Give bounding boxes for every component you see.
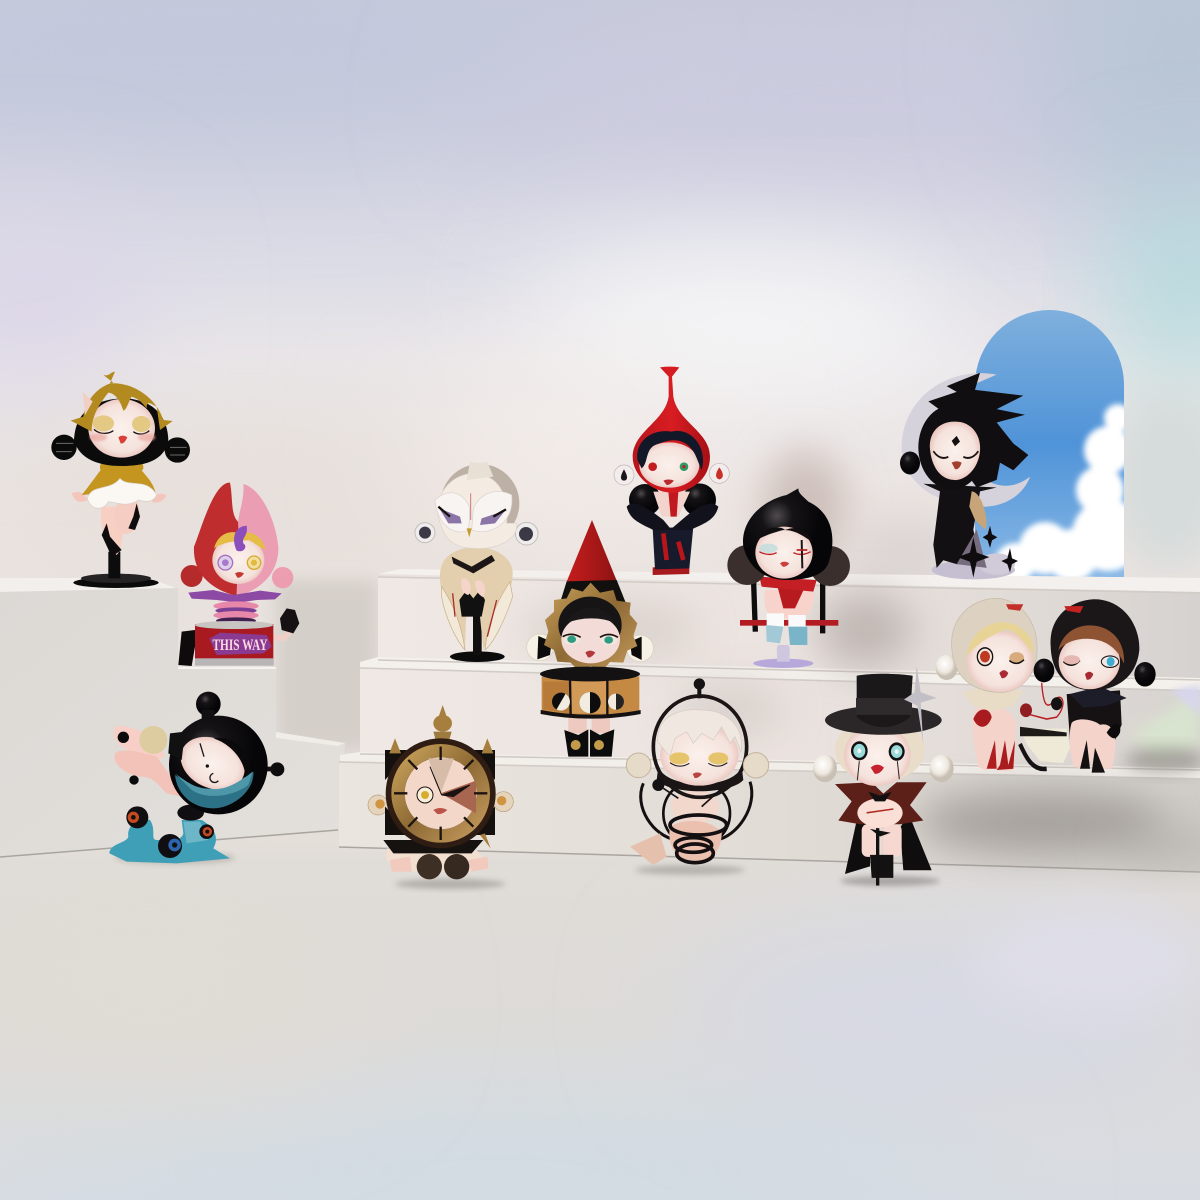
moon base cloud [932,553,1015,579]
hoops frame [641,780,752,847]
dancer stand [73,552,159,588]
left stepped block [0,578,345,857]
owl side eyes [415,522,538,545]
swing stand [753,645,813,668]
hoops head [658,710,742,786]
legs and boots [564,717,614,757]
figure: owl with feather mask [415,462,538,662]
clown head [835,717,925,786]
figure: cone hat sun girl [527,520,653,757]
hoops body and tail [630,790,722,865]
crow robe [923,484,1018,577]
arch window with sky and clouds [975,310,1124,577]
right stepped staircase [339,569,1200,872]
figure: twin girl black hood [1020,599,1156,773]
floor contact shadows [115,852,940,889]
hoops coil [670,815,727,863]
twin one legs and collar [962,687,1023,771]
owl wings and body [440,547,513,650]
hoops pom poms [626,753,769,778]
clock frame and finials [385,705,496,848]
crescent moon [902,373,1030,507]
crow ball [900,452,920,475]
twin two hood [1050,599,1139,690]
figure: jester in a can [178,483,299,666]
twin two body [1020,683,1127,773]
clown cape collar [835,782,927,827]
girl legs [113,726,182,797]
swing girl hair and face [727,488,850,586]
jester hood [181,483,293,596]
figure: red drop girl [614,367,729,575]
figure: clock girl [368,705,513,879]
clock legs and feet [383,840,490,879]
jester arms [178,608,299,666]
figure: crow crescent moon girl [900,373,1030,579]
figure: twin girl cream hood [936,598,1070,771]
owl stand [450,603,505,662]
dancer side buns [51,435,190,463]
twin two side balls [1034,659,1156,687]
dancer legs and skirt [72,463,167,557]
figure: ballerina with gold hair [51,372,190,588]
hoops head frame [652,678,747,807]
figure: top hat clown girl [813,665,954,886]
crow hair and spikes [918,373,1028,489]
clock side orbs [368,792,513,815]
cone hat [557,520,630,613]
red girl arms and gloves [627,483,718,530]
jester tin can [195,621,273,666]
figure: upside-down girl with blue slime [109,692,284,863]
figure: swing girl [727,488,850,668]
red girl bubbles [614,463,729,485]
slime puddle with eyeballs [109,806,230,863]
swing ropes and seat [740,573,838,633]
clown top hat [825,665,942,744]
twin one hood [936,598,1037,692]
owl head and mask [435,462,519,549]
clown cape and legs [845,813,932,886]
orange drum [540,667,641,719]
clock gold ring and face [394,747,487,840]
jester tin can: THIS WAY [212,637,267,654]
figure: white haired girl in hoops [626,678,769,865]
twin book seat [1020,727,1070,769]
girl helmet [168,692,284,821]
swing girl body [759,577,817,645]
red base and legs [653,527,693,575]
red drop hood [633,367,710,493]
gold sun ring [544,583,637,673]
sun girl head [558,597,622,663]
jester collar and spring [188,590,282,624]
dancer head [71,372,173,466]
side half balls [527,634,653,662]
clown side balls [813,755,954,782]
crow face [930,422,980,480]
